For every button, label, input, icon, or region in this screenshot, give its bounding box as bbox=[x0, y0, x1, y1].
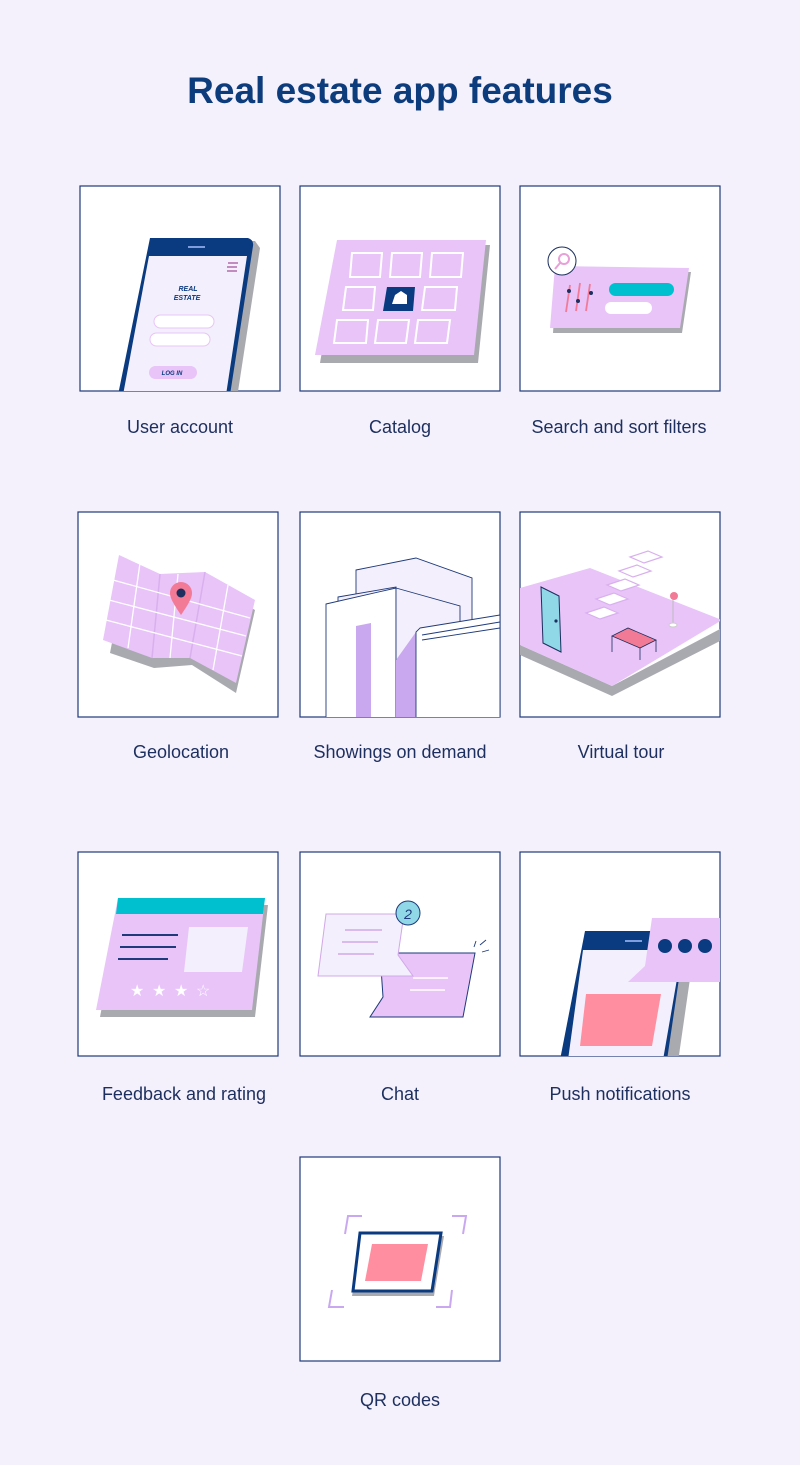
label: chat: Chat bbox=[381, 1084, 419, 1104]
icon: phone login: ESTATE bbox=[174, 295, 201, 302]
icon: review card: ★ bbox=[152, 983, 166, 1000]
label: geolocation: Geolocation bbox=[133, 742, 229, 762]
label: virtual tour: Virtual tour bbox=[578, 742, 664, 762]
panel: feedback and rating bbox=[78, 852, 278, 1056]
label: showings on demand: Showings on demand bbox=[313, 742, 487, 762]
icon: phone login: REAL bbox=[178, 286, 198, 293]
icon: review card: ★ bbox=[130, 983, 144, 1000]
icon: virtual room bbox=[520, 551, 722, 696]
icon: filters bbox=[548, 247, 691, 333]
panel: catalog bbox=[300, 186, 500, 391]
icon: review card: ☆ bbox=[196, 983, 210, 1000]
panel: geolocation bbox=[78, 512, 278, 717]
icon: review card: ★ bbox=[174, 983, 188, 1000]
label: feedback and rating: Feedback and rating bbox=[102, 1084, 266, 1104]
panel: push notifications bbox=[520, 852, 722, 1062]
panel: virtual tour bbox=[520, 512, 722, 717]
title: Real estate app features bbox=[187, 70, 613, 111]
icon: phone login: LOG IN bbox=[162, 371, 183, 377]
icon: chat bubbles bbox=[318, 901, 489, 1017]
panel: user account bbox=[80, 186, 280, 398]
icon: review card bbox=[96, 898, 268, 1017]
label: search filters: Search and sort filters bbox=[531, 417, 707, 437]
icon: phone with notification bbox=[560, 918, 722, 1062]
panel: chat bbox=[300, 852, 500, 1056]
icon: catalog grid bbox=[315, 240, 490, 363]
panel: showings on demand bbox=[300, 512, 500, 720]
panel: qr codes bbox=[300, 1157, 500, 1361]
label: push notifications: Push notifications bbox=[549, 1084, 691, 1104]
label: catalog: Catalog bbox=[369, 417, 431, 437]
label: qr codes: QR codes bbox=[360, 1390, 440, 1410]
icon: map with pin bbox=[103, 555, 255, 693]
panel: search filters bbox=[520, 186, 720, 391]
icon: chat bubbles: 2 bbox=[403, 906, 412, 922]
icon: buildings bbox=[326, 558, 500, 720]
icon: phone login bbox=[118, 238, 260, 398]
label: user account: User account bbox=[127, 417, 233, 437]
icon: qr scanner bbox=[329, 1216, 466, 1307]
